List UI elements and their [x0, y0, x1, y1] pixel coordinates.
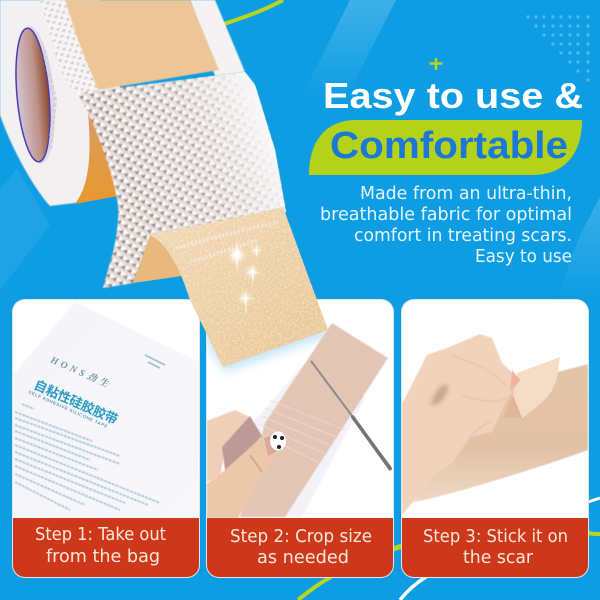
red caption bar — [207, 518, 393, 577]
roll core hole — [10, 25, 60, 165]
caption: step 3 — [423, 526, 568, 568]
description text: breathable fabric for optimal — [320, 204, 572, 225]
patch shadow glow — [207, 322, 329, 376]
hand — [402, 334, 520, 515]
product bag: 自粘性硅胶胶带 — [32, 377, 120, 427]
tape strip — [240, 323, 388, 517]
description text: Made from an ultra-thin, — [360, 183, 572, 204]
product bag: SELF ADHESIVE SILICONE TAPE — [28, 389, 108, 429]
description text: comfort in treating scars. — [354, 225, 572, 246]
roll side — [0, 0, 120, 206]
caption: step 2: Step 2: Crop size — [230, 526, 372, 547]
product bag — [13, 302, 199, 520]
peeled patch — [133, 207, 328, 367]
product bag: HONS劲生 — [48, 353, 112, 391]
description text — [320, 183, 572, 267]
icon: green plus — [430, 58, 442, 70]
caption: step 3: Step 3: Stick it on — [423, 526, 568, 547]
hand holding tape — [207, 410, 286, 518]
panel: step 2 crop size — [206, 299, 394, 578]
silicone patch on arm — [513, 357, 560, 418]
mesh tape strip — [77, 72, 286, 288]
description text: Easy to use — [475, 246, 572, 267]
heading badge: Comfortable: Comfortable — [330, 125, 568, 167]
sparkles — [229, 239, 262, 319]
red caption bar — [402, 518, 588, 577]
caption: step 1 — [35, 524, 166, 567]
panel: step 1 take out from the bag — [12, 299, 200, 578]
panel: step 3 stick it on the scar — [401, 299, 589, 578]
peach backing on roll — [190, 0, 245, 76]
heading badge: Comfortable — [309, 120, 582, 175]
caption: step 2 — [230, 526, 372, 568]
scissors — [311, 361, 391, 468]
forearm — [414, 364, 588, 502]
red caption bar — [13, 518, 199, 577]
decorative dot grid — [526, 15, 590, 82]
caption: step 3: the scar — [463, 547, 534, 568]
title: Easy to use &: Easy to use & — [323, 75, 583, 116]
caption: step 1: from the bag — [46, 546, 160, 567]
product: silicone tape roll — [0, 0, 328, 367]
caption: step 2: as needed — [257, 547, 349, 568]
caption: step 1: Step 1: Take out — [35, 524, 166, 545]
